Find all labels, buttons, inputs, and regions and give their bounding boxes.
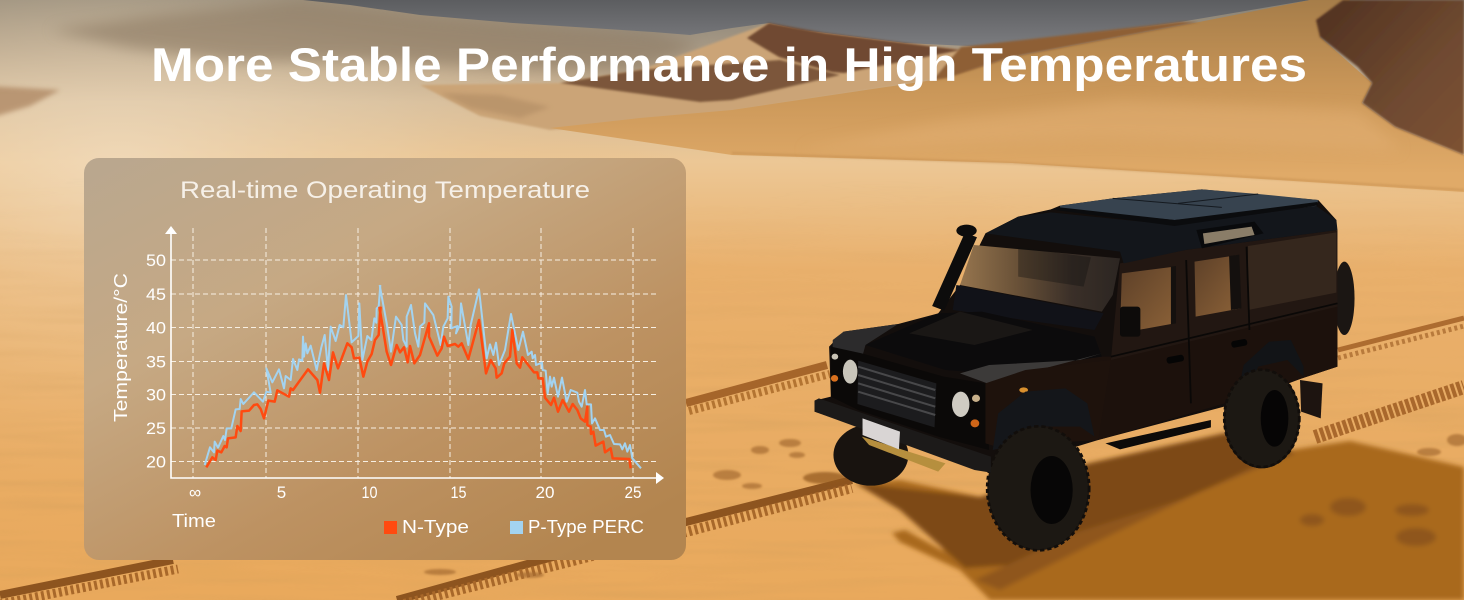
front bumper	[815, 398, 991, 473]
x axis tick labels: 10	[362, 483, 378, 502]
y axis tick labels: 20	[146, 452, 166, 472]
chart grid	[171, 228, 659, 478]
y axis tick labels: 35	[146, 352, 166, 372]
cowl panel	[953, 285, 1104, 330]
front-left tyre	[833, 424, 908, 486]
icon: black off-road vehicle with solar panels	[815, 189, 1355, 550]
hood	[865, 312, 1102, 373]
rear cargo panel	[1248, 232, 1336, 310]
vehicle body	[987, 303, 1337, 440]
y axis tick labels: 50	[146, 251, 166, 270]
door seams and handles	[1111, 247, 1337, 403]
mud flap	[1300, 380, 1323, 418]
spare wheel	[1334, 262, 1355, 335]
heading: Real-time Operating Temperature	[180, 177, 590, 204]
x axis tick labels: 5	[277, 483, 286, 502]
wing mirror	[1120, 307, 1140, 337]
y axis tick labels: 25	[146, 419, 166, 438]
chart axes	[165, 226, 664, 484]
x axis tick labels: ∞	[189, 483, 201, 502]
x axis tick labels: 25	[624, 483, 642, 502]
skid plate	[862, 437, 945, 472]
rear tyre front half	[1224, 370, 1299, 467]
solar panels	[1060, 189, 1318, 220]
roof	[985, 206, 1337, 263]
x axis tick labels: 20	[536, 483, 554, 502]
tyre tracks in the sand	[0, 318, 1464, 600]
x axis tick labels: 15	[450, 483, 466, 502]
panel: real-time operating temperature	[84, 158, 686, 560]
y axis tick labels: 45	[146, 285, 166, 304]
y axis tick labels	[146, 251, 166, 472]
wheel arch flare	[993, 388, 1095, 450]
y axis tick labels: 40	[146, 318, 166, 338]
door windows	[1120, 267, 1175, 333]
x axis tick labels	[189, 483, 642, 502]
vehicle ground shadow	[855, 433, 1464, 600]
windscreen	[960, 245, 1120, 312]
grille	[857, 361, 936, 427]
chart line: P-Type PERC	[205, 285, 641, 468]
front wing panels	[833, 324, 898, 358]
legend: N-Type: N-Type	[402, 517, 469, 537]
chart line: N-Type	[206, 307, 631, 468]
number plate	[863, 418, 900, 449]
front face	[831, 347, 989, 450]
y axis title: Temperature/°C	[111, 273, 131, 422]
snorkel	[938, 235, 971, 308]
legend: N-Type	[384, 517, 469, 537]
headlights and indicators	[843, 360, 857, 384]
rear tyre	[1224, 368, 1300, 468]
footprints	[424, 434, 1464, 578]
side step	[1105, 420, 1211, 449]
roof hatch	[1196, 222, 1264, 248]
vehicle silhouette	[815, 189, 1337, 473]
title: More Stable Performance in High Temperatures	[151, 38, 1307, 91]
legend: P-Type PERC: P-Type PERC	[528, 517, 644, 537]
y axis tick labels: 30	[146, 386, 166, 404]
x axis title: Time	[172, 511, 216, 531]
front-right tyre	[987, 426, 1089, 550]
